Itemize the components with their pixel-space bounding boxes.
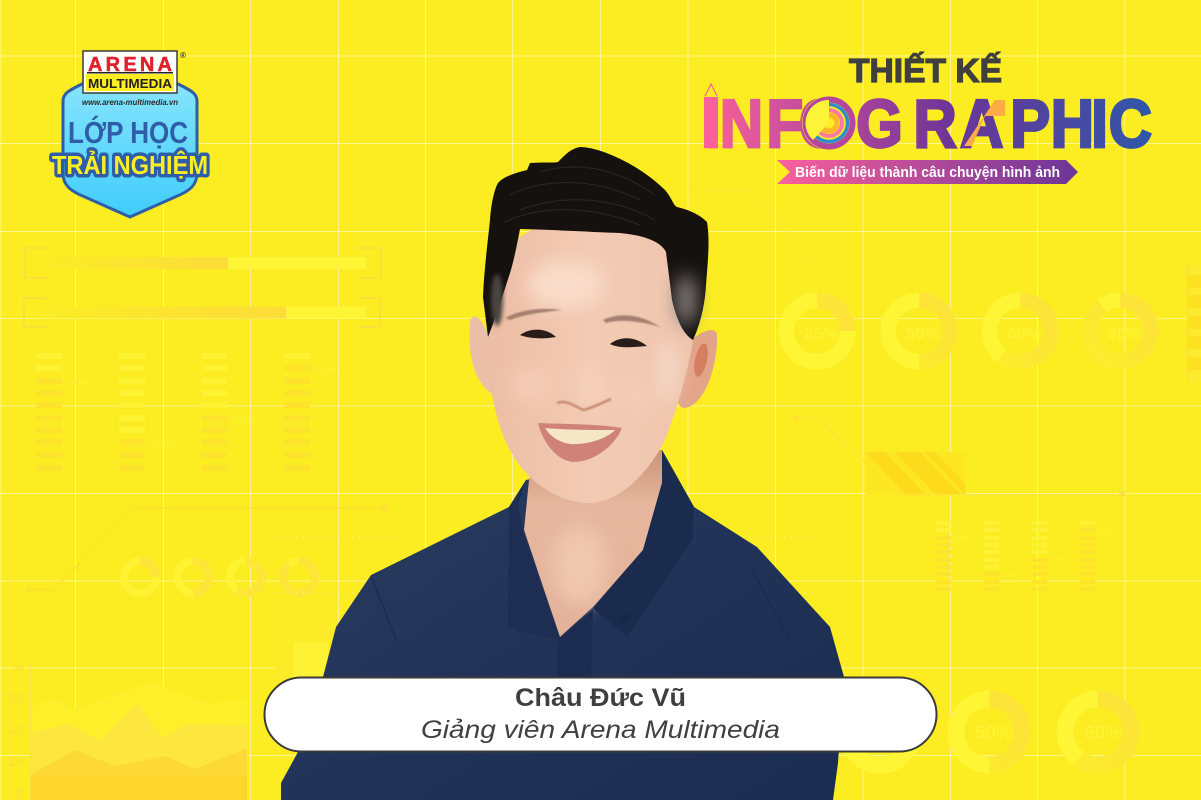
lecturer name: Châu Đức Vũ (515, 684, 686, 712)
large donut row: 60% (1007, 324, 1041, 343)
arena box: ARENA (88, 54, 172, 76)
small bar columns right: 90% (1098, 529, 1112, 536)
bar columns chart: 80% (68, 377, 90, 389)
bottom donut row (847, 699, 1131, 765)
large donut row: 50% (906, 324, 940, 343)
connector line with hatch block (793, 415, 1125, 497)
subtitle ribbon: Biến dữ liệu thành câu chuyện hình ảnh (795, 165, 1060, 181)
left eye (520, 330, 556, 338)
right collar (593, 450, 694, 637)
large donut row: 90% (1107, 324, 1141, 343)
right ear inner (692, 342, 710, 378)
right edge ticks (1187, 265, 1201, 382)
neck (524, 450, 662, 637)
progress bars (24, 248, 381, 327)
collar button (620, 613, 630, 623)
left sideburn shade (491, 274, 503, 326)
website: www.arena-multimedia.vn (82, 97, 178, 107)
decorative block (275, 600, 335, 692)
hair (483, 147, 709, 340)
area chart: 60 (8, 690, 24, 706)
shirt folds (372, 570, 790, 677)
trải nghiệm: TRẢI NGHIỆM (52, 150, 208, 180)
arena box (83, 51, 177, 93)
subtitle ribbon (777, 160, 1078, 184)
left eyebrow (505, 309, 562, 320)
heading: infographic: INFOGRAPHIC (704, 85, 1152, 162)
area chart (8, 658, 247, 800)
right ear (678, 330, 717, 408)
bottom donut row: 50% (975, 723, 1013, 744)
shirt placket (558, 610, 593, 677)
connector line left (26, 504, 388, 593)
name pill (264, 678, 936, 752)
right eyebrow (603, 315, 660, 327)
icon: target letter O (802, 96, 856, 150)
small bar columns right: 30% (1002, 572, 1016, 579)
lớp học: LỚP HỌC (68, 114, 188, 150)
bottom donut row: 60% (1084, 723, 1122, 744)
face shading (512, 261, 676, 411)
heading: thiết kế: THIẾT KẾ (849, 52, 1002, 89)
small bar columns right: 80% (954, 536, 968, 543)
area chart: % (12, 658, 25, 674)
shirt (281, 450, 844, 800)
area chart: 20 (8, 753, 24, 769)
icon: letter A accent (964, 100, 1005, 146)
left ear (470, 316, 492, 394)
mouth (538, 423, 622, 462)
face (487, 215, 698, 503)
small donut charts (124, 561, 315, 593)
bar columns chart: 30% (151, 439, 173, 451)
area chart: 40 (8, 722, 24, 738)
bar columns chart: 50% (233, 413, 255, 425)
course title logo (704, 52, 1152, 184)
dotted guide lines (275, 538, 815, 758)
arena box: MULTIMEDIA (88, 76, 173, 91)
registered mark: ® (180, 51, 186, 60)
bar columns chart: 90% (316, 365, 338, 377)
small bar columns right: 50% (1050, 557, 1064, 564)
nose (557, 399, 611, 410)
teeth (545, 428, 615, 444)
lecturer role: Giảng viên Arena Multimedia (421, 716, 780, 744)
small bar columns right (936, 521, 1112, 591)
arena multimedia logo (52, 51, 208, 217)
large donut row (786, 300, 1151, 362)
large donut row: 25% (804, 324, 838, 343)
left collar (508, 480, 560, 640)
neck highlight (552, 525, 608, 605)
bar columns chart (36, 353, 338, 471)
shield (63, 80, 197, 217)
portrait of the lecturer (281, 147, 844, 800)
right eye (610, 338, 647, 347)
hair highlights (505, 167, 655, 225)
sideburn highlight (676, 274, 696, 326)
top right connector line (690, 190, 819, 266)
icon: pencil letter (704, 84, 718, 148)
